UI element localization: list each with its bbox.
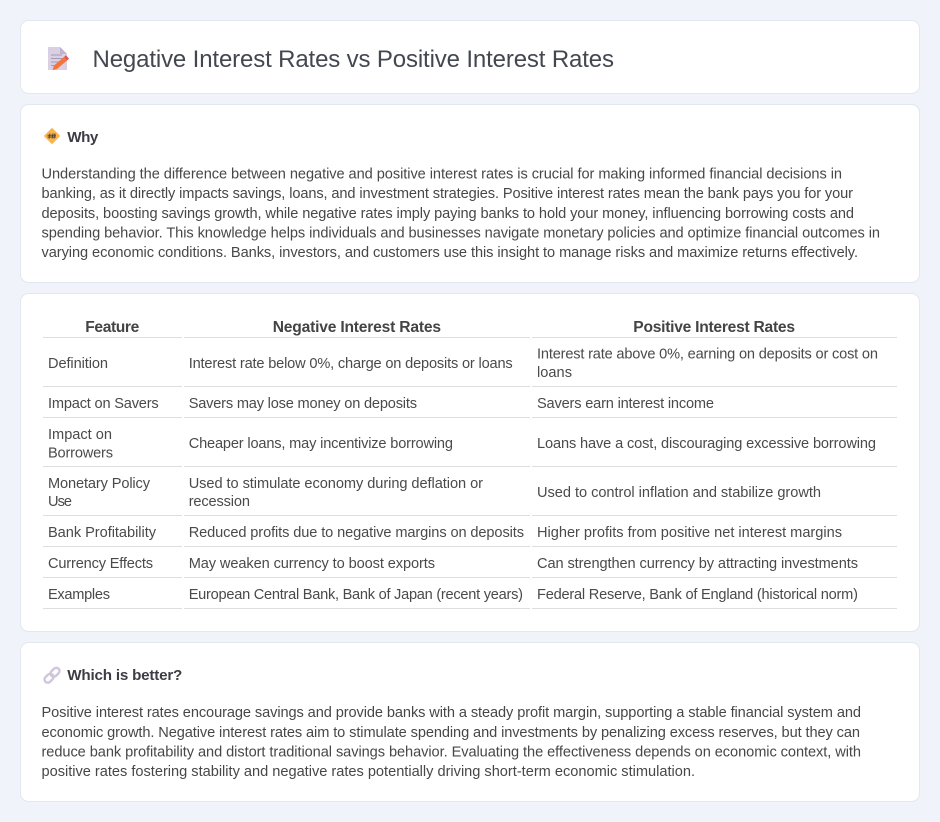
table row: impact on borrowers: Borrowers — [48, 446, 113, 462]
text block: which is better paragraph — [42, 705, 861, 780]
table row: bank profitability — [48, 525, 842, 541]
heading: which is better: Which is better? — [67, 667, 182, 684]
text block: why paragraph: varying economic conditions. Banks, investors, and customers use this insight to manage risks and maximize returns effectively. — [42, 245, 858, 261]
table row: definition: Interest rate below 0%, charge on deposits or loans — [189, 356, 513, 372]
table row: impact on savers: Impact on Savers — [48, 396, 159, 412]
table row: monetary policy use: Monetary Policy — [48, 476, 151, 492]
title: Negative Interest Rates vs Positive Interest Rates — [92, 46, 614, 73]
table row: impact on borrowers: Cheaper loans, may incentivize borrowing — [189, 436, 453, 452]
table row: monetary policy use: Used to stimulate economy during deflation or — [189, 476, 483, 492]
table row: monetary policy use — [48, 476, 821, 510]
table row: currency effects — [48, 556, 858, 572]
text block: which is better paragraph: positive rates fostering stability and negative rates potentially driving short-term economic stimulation. — [42, 764, 695, 780]
table row: monetary policy use: Used to control inflation and stabilize growth — [537, 485, 821, 501]
panel: title header — [20, 20, 920, 94]
table row: impact on borrowers: Loans have a cost, discouraging excessive borrowing — [537, 436, 876, 452]
table row: bank profitability: Bank Profitability — [48, 525, 157, 541]
table row: bank profitability: Higher profits from positive net interest margins — [537, 525, 842, 541]
table row: currency effects: Currency Effects — [48, 556, 153, 572]
panel: which is better — [20, 642, 920, 802]
table row: examples — [48, 587, 858, 603]
text block: which is better paragraph: Positive interest rates encourage savings and provide banks with a steady profit margin, supporting a stable financial system and — [42, 705, 861, 721]
table row: examples: Federal Reserve, Bank of England (historical norm) — [537, 587, 858, 603]
table row: bank profitability: Reduced profits due to negative margins on deposits — [189, 525, 524, 541]
table row: impact on savers: Savers earn interest income — [537, 396, 714, 412]
text block: why paragraph: banking, as it directly impacts savings, loans, and investment strategies. Positive interest rates mean the bank pays you for your — [42, 186, 853, 202]
table row: definition: Definition — [48, 356, 108, 372]
panel: why — [20, 104, 920, 282]
table row: impact on borrowers — [48, 427, 876, 462]
table row: definition: Interest rate above 0%, earning on deposits or cost on — [537, 346, 878, 362]
text block: which is better paragraph: reduce bank profitability and distort traditional savings behavior. Evaluating the effectiveness depends on economic context, with — [42, 744, 861, 760]
table row: monetary policy use: Use — [48, 494, 72, 510]
table row: examples: European Central Bank, Bank of Japan (recent years) — [189, 587, 523, 603]
table row: currency effects: May weaken currency to boost exports — [189, 556, 435, 572]
table row: currency effects: Can strengthen currency by attracting investments — [537, 556, 858, 572]
icon: memo with pencil — [48, 47, 69, 70]
text block: why paragraph: Understanding the difference between negative and positive interest rates is crucial for making informed financial decisions in — [42, 166, 842, 182]
table row: definition — [48, 346, 878, 381]
table row: impact on savers: Savers may lose money on deposits — [189, 396, 417, 412]
table row: impact on borrowers: Impact on — [48, 427, 112, 443]
panel: comparison table — [20, 294, 920, 632]
text block: why paragraph — [42, 166, 880, 261]
table row: examples: Examples — [48, 587, 110, 603]
table row: monetary policy use: recession — [189, 494, 250, 510]
table row: impact on savers — [48, 396, 714, 412]
icon: diamond warning sign — [44, 128, 60, 144]
table header row — [85, 319, 795, 336]
icon: chain link — [43, 666, 61, 684]
text block: which is better paragraph: economic growth. Negative interest rates aim to stimulate spending and investments by penalizing excess reserves, but they can — [42, 725, 860, 741]
text block: why paragraph: deposits, boosting savings growth, while negative rates imply paying banks to hold your money, influencing borrowing costs and — [42, 206, 854, 222]
table header row: Positive Interest Rates — [633, 319, 795, 336]
text block: why paragraph: spending behavior. This knowledge helps individuals and businesses navigate monetary policies and optimize financial outcomes in — [42, 226, 880, 242]
heading: why: Why — [67, 129, 99, 146]
table row: definition: loans — [537, 365, 572, 381]
table header row: Negative Interest Rates — [273, 319, 441, 336]
table header row: Feature — [85, 319, 140, 336]
